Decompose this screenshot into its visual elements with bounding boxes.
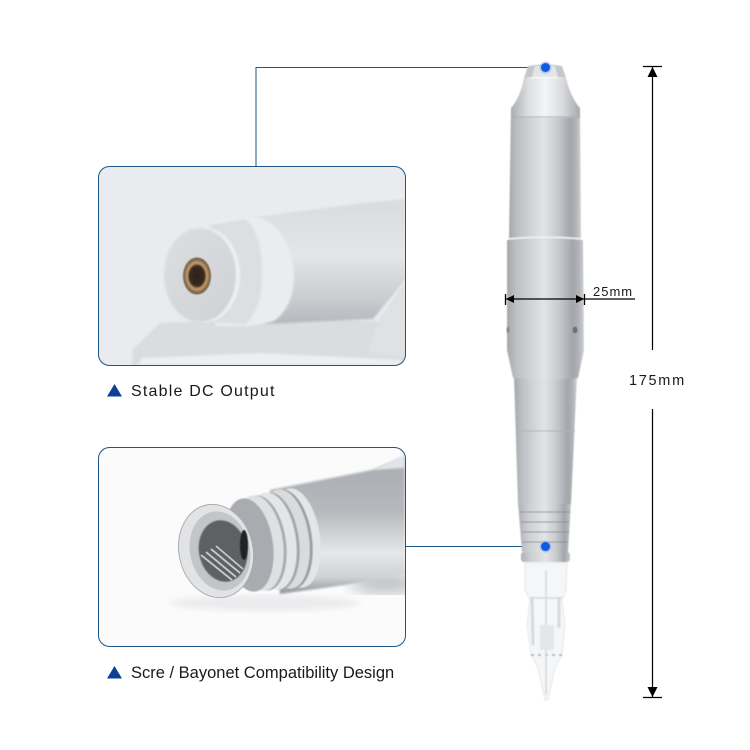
middle section	[507, 238, 584, 380]
dimension: 175mm height: 175mm	[629, 373, 686, 389]
mouth rim	[178, 504, 254, 598]
caption: Scre / Bayonet Compatibility Design: Scre / Bayonet Compatibility Design	[131, 664, 394, 682]
main cylinder	[250, 199, 405, 324]
icon: triangle bullet	[107, 666, 122, 678]
threaded bore	[198, 520, 248, 582]
thread ribs	[230, 488, 320, 592]
lower grip	[514, 376, 577, 504]
callout dot: top	[540, 62, 552, 74]
stand upright	[380, 287, 404, 320]
dimension: 25mm width	[505, 284, 635, 305]
stepped neck	[215, 217, 294, 326]
nose cone	[511, 78, 580, 118]
needle cartridge	[525, 563, 567, 700]
connector line: top callout	[256, 68, 545, 166]
panel: Screw / Bayonet photo	[98, 447, 420, 646]
brass socket	[183, 258, 211, 294]
stand under pen	[132, 318, 405, 365]
side holes	[572, 326, 578, 334]
dimension: 25mm width: 25mm	[593, 284, 633, 299]
icon: triangle bullet	[107, 384, 122, 396]
upper body	[509, 108, 581, 238]
end cap	[208, 228, 240, 322]
caption: Stable DC Output: Stable DC Output	[131, 383, 276, 400]
pen product image	[506, 64, 584, 700]
thread section	[518, 503, 571, 562]
tip	[524, 64, 566, 78]
barrel	[270, 457, 405, 594]
dimension: 175mm height	[629, 66, 686, 698]
callout dot: bottom	[540, 540, 552, 552]
shadow	[175, 596, 355, 610]
panel: Stable DC Output photo	[98, 166, 406, 366]
connector line: bottom callout	[405, 546, 545, 548]
